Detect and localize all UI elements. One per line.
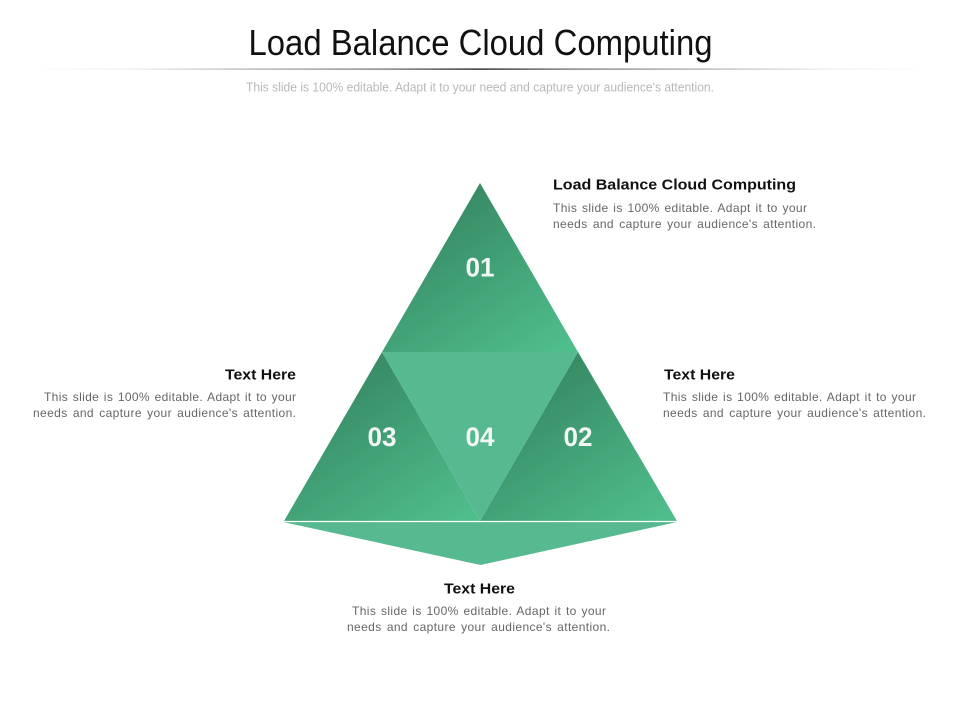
text block: top right: needs and capture your audience's attention. [553, 217, 816, 231]
text block: bottom: needs and capture your audience's attention. [347, 620, 610, 634]
segment 04: center inverted triangle: 04 [466, 422, 494, 452]
text block: right: This slide is 100% editable. Adapt it to your [663, 390, 916, 404]
segment 02: right triangle [480, 352, 677, 521]
base facet [283, 522, 677, 565]
text block: top right: Load Balance Cloud Computing [553, 176, 796, 194]
text block: right [663, 366, 926, 420]
text block: left: needs and capture your audience's attention. [33, 406, 296, 420]
segment 03: left triangle [284, 352, 480, 521]
segment 01: top triangle: 01 [466, 252, 494, 282]
subtitle: This slide is 100% editable. Adapt it to your need and capture your audience's attention. [246, 80, 714, 94]
text block: top right [553, 176, 816, 231]
text block: right: Text Here [664, 366, 735, 384]
text block: left [33, 366, 296, 420]
text block: bottom: This slide is 100% editable. Adapt it to your [352, 604, 606, 618]
text block: bottom: Text Here [444, 580, 515, 598]
segment 02: right triangle: 02 [564, 422, 592, 452]
segment 04: center inverted triangle [382, 352, 578, 521]
text block: bottom [347, 580, 610, 634]
segment 01: top triangle [382, 183, 578, 352]
segment 03: left triangle: 03 [368, 422, 396, 452]
text block: left: This slide is 100% editable. Adapt it to your [44, 390, 296, 404]
text block: top right: This slide is 100% editable. Adapt it to your [553, 201, 807, 215]
title: Load Balance Cloud Computing [248, 22, 712, 63]
text block: right: needs and capture your audience's attention. [663, 406, 926, 420]
pyramid diagram [283, 183, 677, 565]
text block: left: Text Here [225, 366, 296, 384]
